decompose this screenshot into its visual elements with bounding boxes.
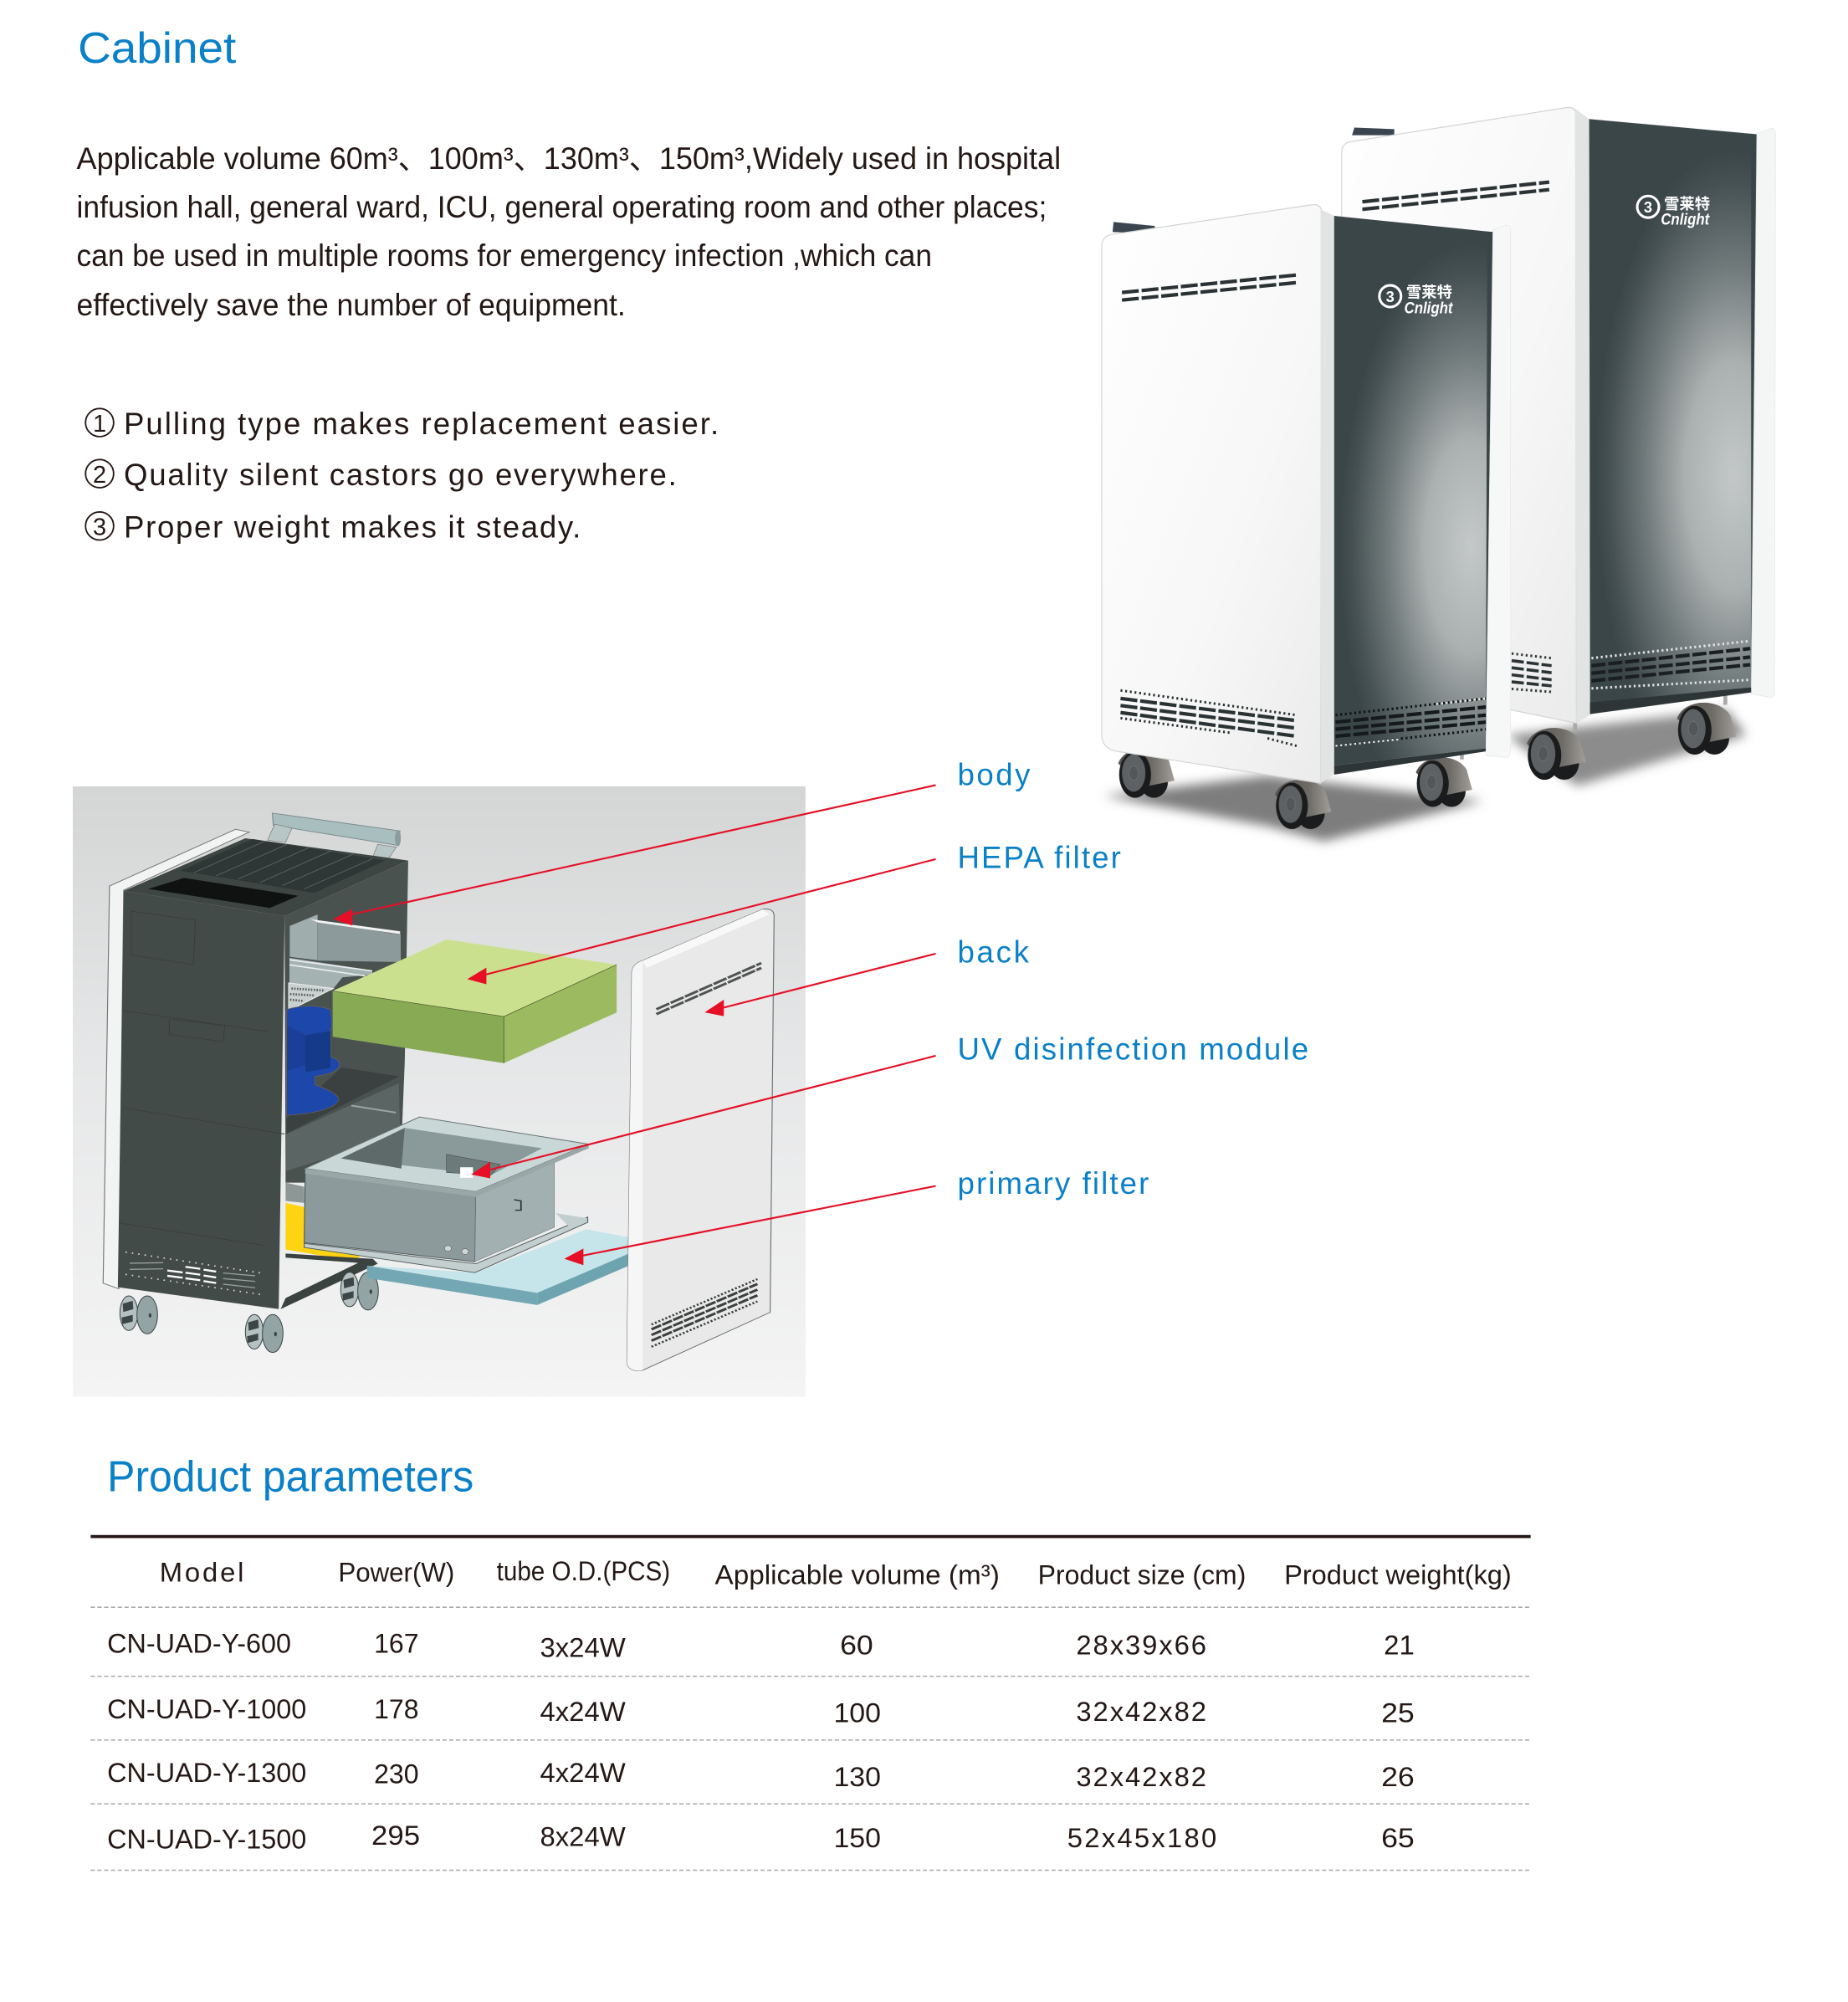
- feature 3: Proper weight makes it steady.: [124, 509, 581, 544]
- row CN-UAD-Y-1000: CN-UAD-Y-1000: [107, 1693, 306, 1724]
- title: Cabinet: Cabinet: [78, 23, 237, 72]
- arrow: back: [704, 954, 936, 1016]
- row CN-UAD-Y-1000: [107, 1693, 1415, 1728]
- row CN-UAD-Y-1300: 230: [374, 1759, 419, 1790]
- description paragraph: Applicable volume 60m³、100m³、130m³、150m³,Widely used in hospital: [77, 141, 1061, 176]
- row CN-UAD-Y-1500: 150: [833, 1822, 881, 1853]
- feature 3: 3: [93, 514, 106, 540]
- logo: Cnlight front unit: 雪莱特: [1406, 284, 1452, 301]
- parameters table: [90, 1535, 1531, 1871]
- row CN-UAD-Y-600: 60: [840, 1630, 873, 1661]
- label: HEPA filter: HEPA filter: [957, 841, 1121, 875]
- description paragraph: can be used in multiple rooms for emergency infection ,which can: [77, 238, 932, 273]
- product photo: two cabinets: [1102, 107, 1775, 841]
- table header row: tube O.D.(PCS): [497, 1555, 670, 1586]
- row CN-UAD-Y-600: 167: [374, 1627, 419, 1658]
- row CN-UAD-Y-1500: [107, 1820, 1415, 1855]
- exploded view panel: [73, 786, 806, 1396]
- table header row: Model: [160, 1557, 243, 1588]
- row CN-UAD-Y-1300: 32x42x82: [1076, 1761, 1206, 1792]
- back unit: [1342, 107, 1775, 780]
- row CN-UAD-Y-1300: 4x24W: [540, 1757, 626, 1788]
- label: back: back: [957, 935, 1030, 970]
- label: UV disinfection module: UV disinfection module: [957, 1032, 1308, 1067]
- logo: Cnlight back unit: 雪莱特: [1664, 195, 1710, 212]
- feature 1: Pulling type makes replacement easier.: [124, 407, 719, 441]
- vent slots: [1122, 275, 1298, 300]
- front unit: [1102, 205, 1511, 829]
- description paragraph: [77, 141, 1061, 322]
- cabinet vents and castors: [120, 1252, 378, 1353]
- description paragraph: infusion hall, general ward, ICU, general operating room and other places;: [77, 190, 1047, 224]
- row CN-UAD-Y-1300: 26: [1381, 1761, 1415, 1792]
- feature 2: 2: [93, 462, 106, 489]
- row CN-UAD-Y-1500: 8x24W: [540, 1821, 626, 1852]
- arrow: body: [333, 785, 936, 925]
- logo: Cnlight back unit: Cnlight: [1661, 211, 1710, 229]
- vent slots: [1362, 182, 1549, 209]
- row CN-UAD-Y-1000: 25: [1381, 1697, 1415, 1728]
- row CN-UAD-Y-1300: CN-UAD-Y-1300: [107, 1757, 306, 1788]
- table header row: Product size (cm): [1038, 1559, 1246, 1590]
- row CN-UAD-Y-600: [107, 1627, 1415, 1663]
- logo: Cnlight front unit: Cnlight: [1405, 300, 1454, 318]
- row CN-UAD-Y-600: 28x39x66: [1076, 1630, 1206, 1661]
- logo: Cnlight front unit: [1380, 284, 1454, 318]
- logo: Cnlight back unit: [1637, 195, 1710, 229]
- table header row: [160, 1555, 1512, 1590]
- arrow: UV disinfection module: [471, 1056, 936, 1178]
- row CN-UAD-Y-600: 21: [1384, 1630, 1415, 1661]
- row CN-UAD-Y-1500: 295: [371, 1820, 420, 1851]
- table header row: Applicable volume (m³): [715, 1559, 1000, 1590]
- feature list: [85, 407, 719, 544]
- arrow: primary filter: [564, 1186, 936, 1265]
- label: primary filter: primary filter: [957, 1166, 1149, 1201]
- row CN-UAD-Y-1000: 100: [833, 1697, 881, 1728]
- row CN-UAD-Y-1300: 130: [833, 1761, 881, 1792]
- row CN-UAD-Y-1000: 4x24W: [540, 1696, 626, 1727]
- cabinet interior: shelf and fan: [286, 914, 401, 1171]
- cabinet body: [103, 813, 408, 1309]
- label: body: body: [957, 757, 1031, 791]
- heading: Product parameters: Product parameters: [107, 1452, 474, 1500]
- feature 2: Quality silent castors go everywhere.: [124, 458, 677, 492]
- arrow: HEPA filter: [468, 859, 936, 985]
- logo: Cnlight front unit: 3: [1386, 288, 1395, 305]
- UV disinfection module part: [305, 1117, 589, 1272]
- row CN-UAD-Y-1000: 178: [374, 1693, 419, 1724]
- feature 1: 1: [93, 411, 106, 438]
- row CN-UAD-Y-600: 3x24W: [540, 1632, 626, 1663]
- description paragraph: effectively save the number of equipment.: [77, 288, 626, 322]
- row CN-UAD-Y-1000: 32x42x82: [1076, 1696, 1206, 1727]
- row CN-UAD-Y-1500: 65: [1381, 1822, 1415, 1853]
- logo: Cnlight back unit: 3: [1644, 198, 1652, 216]
- row CN-UAD-Y-600: CN-UAD-Y-600: [107, 1627, 291, 1658]
- row CN-UAD-Y-1300: [107, 1757, 1415, 1792]
- back panel part: [627, 909, 774, 1370]
- primary filter part: [367, 1229, 629, 1305]
- row CN-UAD-Y-1500: CN-UAD-Y-1500: [107, 1824, 306, 1855]
- row CN-UAD-Y-1500: 52x45x180: [1067, 1822, 1216, 1853]
- HEPA filter part: [333, 940, 617, 1063]
- table header row: Product weight(kg): [1284, 1559, 1512, 1590]
- shadow: [1103, 710, 1747, 841]
- table header row: Power(W): [338, 1557, 454, 1588]
